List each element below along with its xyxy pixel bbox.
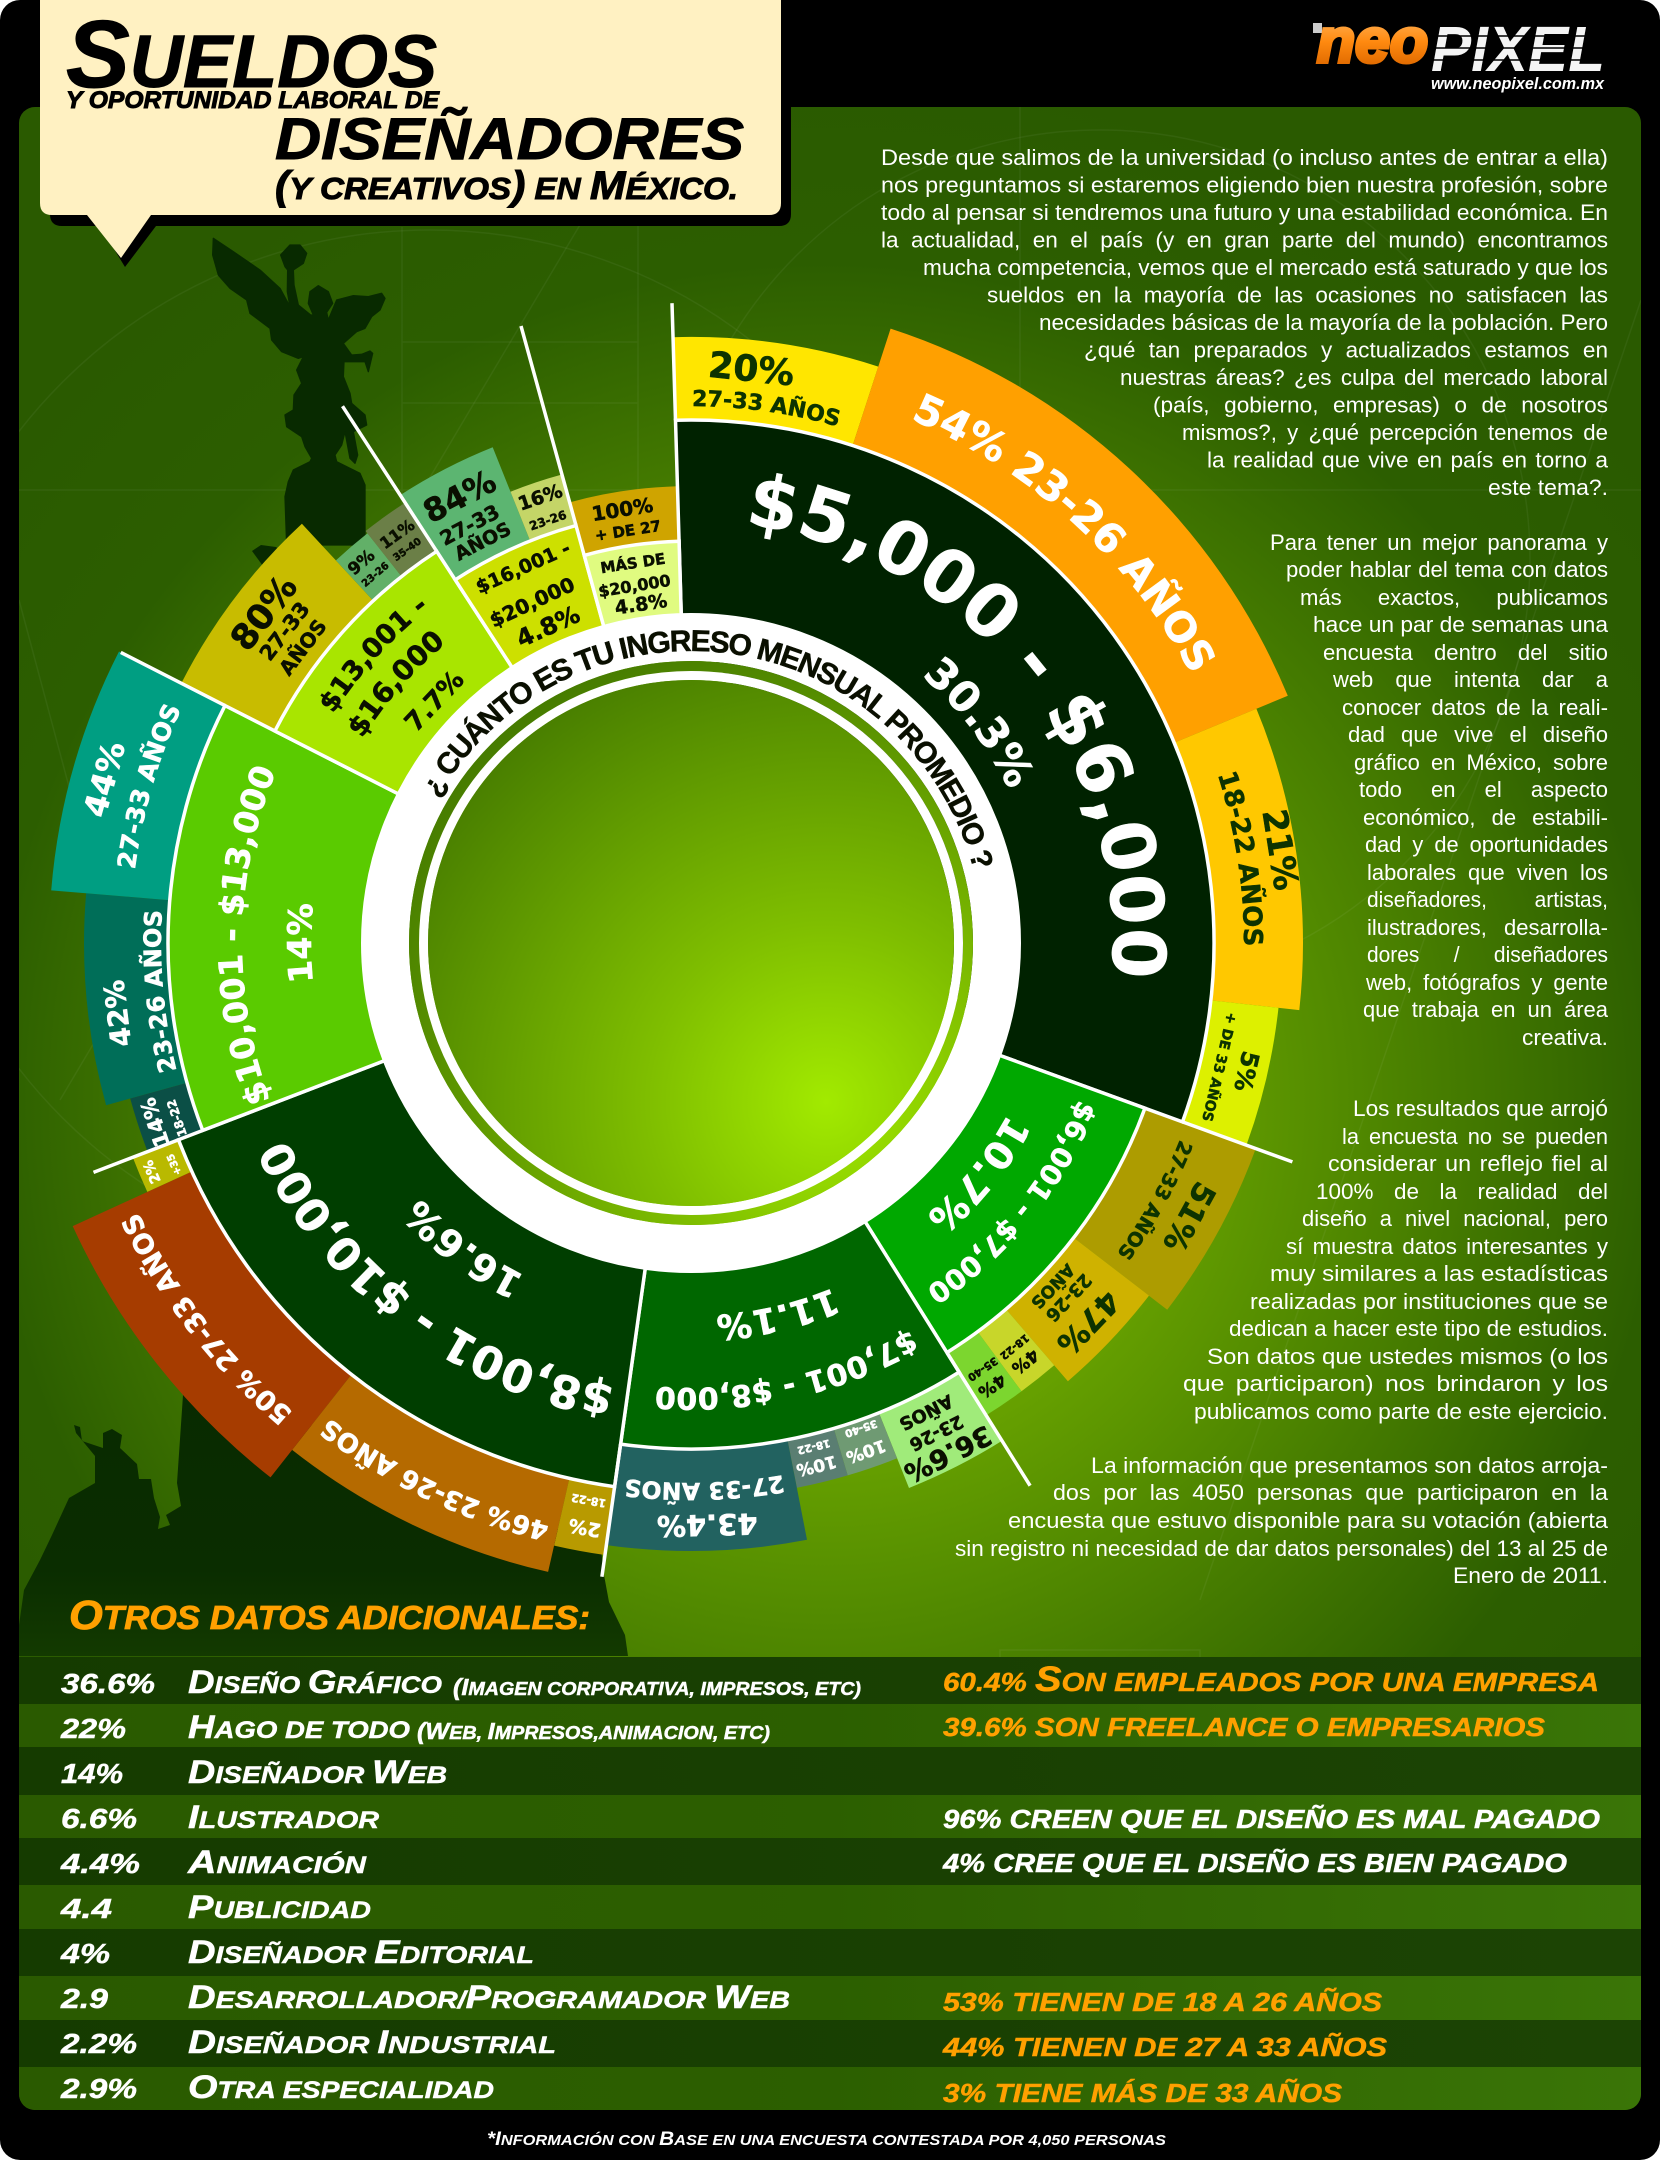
table: specialties column: ANIMACIÓN (187, 1844, 367, 1880)
table: percentages column: 4.4 (60, 1893, 113, 1924)
table: pay perception facts: 4% CREE QUE EL DISEÑO ES BIEN PAGADO (942, 1848, 1567, 1878)
segment: 44% 27-33 años: 27-33 AÑOS (117, 704, 180, 868)
intro text paragraph 1: la actualidad, en el país (y en gran parte del mundo) encontramos (881, 228, 1608, 252)
intro text paragraph 3: realizadas por instituciones que se (1250, 1289, 1608, 1314)
segment: 47% 23-26 años (1006, 1238, 1149, 1381)
intro text paragraph 1: nuestras áreas? ¿es culpa del mercado laboral (1120, 365, 1608, 390)
wedge: $16,001 - $20,000 4.8% (455, 526, 604, 670)
segment: 5% + de 33 años: 5% (1228, 1048, 1265, 1094)
intro text paragraph 3: muy similares a las estadísticas (1270, 1261, 1608, 1286)
wedge: $6,001 - $7,000 10.7% (867, 1054, 1148, 1353)
segment: 46% 23-26 años (292, 1376, 569, 1572)
segment: 44% 27-33 años: 44% (76, 737, 133, 821)
intro text paragraph 4: sin registro ni necesidad de dar datos personales) del 13 al 25 de (955, 1536, 1608, 1561)
table: percentages column: 6.6% (61, 1803, 137, 1834)
table: specialties column (187, 1664, 861, 2105)
intro text paragraph 3: dedican a hacer este tipo de estudios. (1229, 1316, 1608, 1341)
segment: 36.6% 23-26 años: AÑOS (896, 1390, 957, 1436)
segment: 51% 27-33 años: 27-33 AÑOS (1118, 1140, 1192, 1260)
title text: Y OPORTUNIDAD LABORAL DE (66, 87, 440, 114)
intro text paragraph 4 (955, 1453, 1609, 1588)
segment: 54% 23-26 años: 54% 23-26 AÑOS (914, 393, 1216, 670)
segment: 80% 27-33 años: 80% (223, 568, 306, 659)
intro text paragraph 2: dad que vive el diseño (1348, 722, 1608, 747)
table: age facts: 53% TIENEN DE 18 A 26 AÑOS (943, 1987, 1383, 2017)
segment: 2% 18-22: 18-22 (570, 1491, 607, 1510)
segment: 2% 18-22 (554, 1478, 615, 1555)
data table stripes (19, 1657, 1641, 2110)
segment: 4% 18-22: 4% (1007, 1344, 1042, 1378)
intro text paragraph 4: Enero de 2011. (1453, 1563, 1608, 1588)
intro text paragraph 1: mucha competencia, vemos que el mercado está saturado y que los (923, 255, 1608, 280)
wedge: $10,001 - $13,000 14%: 14% (286, 904, 313, 981)
table: specialties column: HAGO DE TODO (188, 1709, 410, 1745)
wedge: $7,001 - $8,000 11.1% (622, 1222, 962, 1451)
footnote: *INFORMACIÓN CON BASE EN UNA ENCUESTA CONTESTADA POR 4,050 PERSONAS (487, 2129, 1166, 2150)
intro text paragraph 2: encuesta dentro del sitio (1323, 640, 1608, 665)
segment: 4% 35-40 (947, 1332, 1022, 1415)
title text: DISEÑADORES (275, 107, 744, 172)
intro text paragraph 2: más exactos, publicamos (1300, 585, 1608, 610)
segment: 21% 18-22 años: 18-22 AÑOS (1218, 772, 1267, 945)
segment: 51% 27-33 años (1075, 1110, 1256, 1310)
table: specialties column: DISEÑO GRÁFICO (188, 1664, 442, 1700)
neopixel logo: www.neopixel.com.mx (1431, 74, 1605, 93)
segment: 100% + de 27: + DE 27 (594, 517, 662, 545)
segment: 14% 18-22 (130, 1083, 203, 1152)
intro text paragraph 2: web, fotógrafos y gente (1365, 970, 1608, 995)
intro text paragraph 3: publicamos como parte de este ejercicio. (1194, 1399, 1608, 1424)
title speech bubble (40, 0, 791, 267)
intro text paragraph 1: necesidades básicas de la mayoría de la población. Pero (1039, 310, 1608, 335)
segment: 10% 35-40 (834, 1413, 897, 1475)
segment: 84% 27-33 años: AÑOS (450, 516, 515, 565)
segment: 47% 23-26 años: AÑOS (1026, 1259, 1080, 1314)
intro text paragraph 1: mismos?, y ¿qué percepción tenemos de (1182, 420, 1608, 445)
segment: 11% 35-40: 11% (376, 515, 418, 553)
intro text paragraph 2: ilustradores, desarrolla- (1367, 915, 1608, 940)
intro text paragraph 1: sueldos en la mayoría de las ocasiones no satisfacen las (987, 282, 1608, 308)
segment: 21% 18-22 años (1176, 708, 1306, 1010)
intro text paragraph 2: poder hablar del tema con datos (1286, 557, 1608, 582)
segment: 84% 27-33 años: 84% (417, 462, 502, 531)
segment: 10% 18-22: 10% (794, 1451, 838, 1480)
segment: 43.4% 27-33 años (608, 1441, 807, 1551)
intro text paragraph 2: Para tener un mejor panorama y (1270, 530, 1608, 555)
wedge: $8,001 - $10,000 16.6% (176, 1062, 647, 1489)
segment: 20% 27-33 años: 27-33 AÑOS (694, 390, 840, 426)
wedge: $8,001 - $10,000 16.6%: 16.6% (406, 1201, 522, 1298)
segment: 20% 27-33 años: 20% (706, 345, 796, 395)
segment: 43.4% 27-33 años: 43.4% (656, 1506, 758, 1543)
segment: 9% 23-26: 9% (344, 546, 379, 580)
table: employment facts (943, 1660, 1599, 1742)
table: specialties column: (WEB, IMPRESOS,ANIMACION, ETC) (417, 1718, 770, 1744)
segment: 2% +35: 2% (140, 1158, 165, 1186)
table: percentages column: 2.9 (60, 1983, 108, 2014)
intro text paragraph 2: dores / diseñadores (1367, 942, 1608, 967)
segment: 50% 27-33 años: 50% 27-33 AÑOS (122, 1214, 292, 1426)
table: age facts (942, 1987, 1388, 2108)
intro text paragraph 2: web que intenta dar a (1332, 667, 1609, 692)
intro text paragraph 4: La información que presentamos son datos arroja- (1091, 1453, 1608, 1478)
intro text paragraph 4: encuesta que estuvo disponible para su votación (abierta (1008, 1508, 1609, 1533)
wedge: $13,001 - $16,000 7.7% (275, 551, 514, 795)
segment: 84% 27-33 años (400, 447, 530, 580)
segment: 16% 23-26: 16% (515, 480, 565, 516)
intro text paragraph 3: diseño a nivel nacional, pero (1302, 1206, 1608, 1231)
table: specialties column: DISEÑADOR WEB (188, 1754, 447, 1790)
wedge: más de $20,000 4.8%: 4.8% (613, 590, 669, 619)
segment: 80% 27-33 años: AÑOS (274, 615, 332, 680)
segment: 80% 27-33 años (181, 524, 373, 731)
wedge: $16,001 - $20,000 4.8%: 4.8% (512, 600, 584, 653)
table: percentages column: 14% (61, 1758, 123, 1789)
neopixel logo: neo (1317, 7, 1428, 76)
intro text paragraph 2: gráfico en México, sobre (1354, 750, 1608, 775)
table: pay perception facts (942, 1804, 1600, 1878)
intro text paragraph 3: considerar un reflejo fiel al (1328, 1151, 1608, 1176)
table: percentages column (60, 1668, 155, 2104)
intro text paragraph 2: todo en el aspecto (1359, 777, 1608, 802)
segment: 2% 18-22: 2% (567, 1514, 603, 1541)
segment: 10% 35-40: 10% (843, 1435, 888, 1467)
segment: 2% +35: +35 (165, 1152, 184, 1177)
segment: 4% 18-22 (978, 1309, 1054, 1391)
segment: 14% 18-22: 14% (136, 1095, 175, 1150)
intro text paragraph 3: sí muestra datos interesantes y (1286, 1234, 1608, 1259)
segment: 36.6% 23-26 años (879, 1372, 1002, 1488)
intro text paragraph 1: este tema?. (1488, 475, 1608, 500)
segment: 4% 18-22: 18-22 (997, 1331, 1031, 1362)
segment: 42% 23-26 años: 23-26 AÑOS (138, 912, 176, 1073)
wedge: más de $20,000 4.8% (584, 541, 681, 629)
wedge: $8,001 - $10,000 16.6%: $8,001 - $10,000 (261, 1144, 612, 1418)
segment: 47% 23-26 años: 23-26 (1041, 1269, 1096, 1325)
wedge: $6,001 - $7,000 10.7%: 10.7% (929, 1117, 1029, 1232)
segment: 43.4% 27-33 años: 27-33 AÑOS (626, 1475, 784, 1505)
table: percentages column: 2.9% (60, 2073, 137, 2104)
segment: 14% 18-22: 18-22 (164, 1098, 190, 1138)
table: employment facts: 39.6% SON FREELANCE O EMPRESARIOS (943, 1712, 1546, 1742)
segment: 10% 35-40: 35-40 (843, 1417, 879, 1439)
table: specialties column: DISEÑADOR EDITORIAL (188, 1934, 534, 1970)
segment: 50% 27-33 años (72, 1172, 350, 1478)
wedge: más de $20,000 4.8%: MÁS DE (599, 549, 667, 577)
table: percentages column: 36.6% (61, 1668, 155, 1699)
wedge: $5,000 - $6,000 30.3%: 30.3% (924, 656, 1034, 787)
segment: 16% 23-26: 23-26 (528, 508, 568, 533)
intro text paragraph 2: conocer datos de la reali- (1342, 695, 1608, 720)
segment: 16% 23-26 (510, 474, 576, 541)
intro text paragraph 3: la encuesta no se pueden (1342, 1124, 1608, 1149)
wedge: $13,001 - $16,000 7.7%: $16,000 (348, 632, 442, 736)
segment: 80% 27-33 años: 27-33 (255, 597, 315, 665)
segment: 46% 23-26 años: 46% 23-26 AÑOS (320, 1420, 548, 1540)
segment: 2% +35 (133, 1140, 192, 1192)
wedge: $13,001 - $16,000 7.7%: 7.7% (399, 665, 470, 738)
wedge: $16,001 - $20,000 4.8%: $16,001 - (473, 537, 574, 598)
wedge: $6,001 - $7,000 10.7%: $6,001 - $7,000 (930, 1102, 1095, 1302)
neopixel logo (1313, 7, 1610, 93)
wedge: $7,001 - $8,000 11.1%: 11.1% (717, 1289, 838, 1341)
intro text paragraph 2: hace un par de semanas una (1313, 612, 1609, 637)
segment: 36.6% 23-26 años: 23-26 (906, 1410, 967, 1455)
segment: 10% 18-22 (788, 1428, 848, 1488)
intro text paragraph 4: dos por las 4050 personas que participaron en la (1053, 1480, 1609, 1505)
intro text paragraph 1: ¿qué tan preparados y actualizados estamos en (1084, 338, 1608, 362)
wedge: $7,001 - $8,000 11.1%: $7,001 - $8,000 (656, 1330, 916, 1410)
segment: 84% 27-33 años: 27-33 (436, 499, 504, 551)
segment: 42% 23-26 años (84, 893, 186, 1106)
table: specialties column: PUBLICIDAD (188, 1889, 371, 1925)
wedge: $10,001 - $13,000 14% (168, 706, 400, 1130)
table: percentages column: 2.2% (60, 2028, 137, 2059)
wedge: más de $20,000 4.8%: $20,000 (597, 571, 672, 601)
table: specialties column: DESARROLLADOR/ PROGRAMADOR WEB (188, 1979, 790, 2015)
table: age facts: 3% TIENE MÁS DE 33 AÑOS (943, 2078, 1343, 2108)
intro text paragraph 1: Desde que salimos de la universidad (o incluso antes de entrar a ella) (881, 145, 1608, 170)
white ring (385, 637, 997, 1249)
intro text paragraph 3: Los resultados que arrojó (1353, 1096, 1608, 1121)
ring question: cuánto es tu ingreso: ¿ CUÁNTO ES TU INGRESO MENSUAL PROMEDIO ? (428, 630, 992, 866)
segment: 44% 27-33 años (51, 652, 223, 900)
segment: 9% 23-26 (336, 533, 402, 601)
table: specialties column: DISEÑADOR INDUSTRIAL (188, 2024, 556, 2060)
intro text paragraph 2: creativa. (1522, 1025, 1608, 1050)
segment: 100% + de 27 (570, 486, 679, 555)
intro text paragraph 2 (1270, 530, 1609, 1050)
intro text paragraph 2: económico, de estabili- (1363, 805, 1608, 830)
intro text paragraph 2: laborales que viven los (1367, 860, 1608, 885)
intro text paragraph 2: diseñadores, artistas, (1367, 887, 1608, 912)
intro text paragraph 3: 100% de la realidad del (1316, 1179, 1608, 1204)
table: percentages column: 22% (60, 1713, 126, 1744)
wedge: $13,001 - $16,000 7.7%: $13,001 - (320, 601, 425, 712)
segment: 10% 18-22: 18-22 (796, 1436, 831, 1456)
heading: otros datos adicionales: OTROS DATOS ADICIONALES: (69, 1592, 590, 1638)
segment: 5% + de 33 años: + DE 33 AÑOS (1198, 1011, 1240, 1123)
wedge: $5,000 - $6,000 30.3%: $5,000 - $6,000 (750, 473, 1168, 976)
wedge: $16,001 - $20,000 4.8%: $20,000 (486, 572, 578, 632)
segment: 54% 23-26 años (853, 328, 1288, 742)
table: age facts: 44% TIENEN DE 27 A 33 AÑOS (942, 2032, 1388, 2062)
segment: 100% + de 27: 100% (590, 493, 655, 526)
segment: 11% 35-40 (366, 503, 437, 576)
segment: 9% 23-26: 23-26 (360, 561, 391, 590)
intro text paragraph 2: que trabaja en un área (1363, 997, 1609, 1022)
segment: 11% 35-40: 35-40 (391, 536, 424, 564)
silhouette: monument base with figure (19, 1370, 628, 1656)
intro text paragraph 3 (1183, 1096, 1608, 1424)
intro text paragraph 1: todo al pensar si tendremos una futuro y una estabilidad económica. En (881, 200, 1608, 225)
wedge: $10,001 - $13,000 14%: $10,001 - $13,000 (218, 766, 274, 1104)
title text: (Y CREATIVOS ) EN MÉXICO. (275, 164, 738, 208)
segment: 5% + de 33 años (1182, 1000, 1278, 1145)
segment: 20% 27-33 años (674, 336, 878, 444)
segment: 36.6% 23-26 años: 36.6% (899, 1419, 997, 1488)
segment: 4% 35-40: 4% (974, 1369, 1009, 1402)
title text (66, 1, 744, 208)
table: pay perception facts: 96% CREEN QUE EL DISEÑO ES MAL PAGADO (943, 1804, 1600, 1834)
table: percentages column: 4.4% (60, 1848, 140, 1879)
intro text paragraph 3: Son datos que ustedes mismos (o los (1207, 1344, 1608, 1369)
table: specialties column: (IMAGEN CORPORATIVA, IMPRESOS, ETC) (453, 1674, 861, 1700)
table: specialties column: ILUSTRADOR (188, 1799, 380, 1835)
intro text paragraph 1: (país, gobierno, empresas) o de nosotros (1153, 392, 1608, 418)
central disk with thin rings (414, 666, 968, 1220)
segment: 21% 18-22 años: 21% (1254, 806, 1306, 893)
neopixel logo: PIXEL (1431, 13, 1605, 85)
table: percentages column: 4% (60, 1938, 110, 1969)
segment: 47% 23-26 años: 47% (1049, 1283, 1127, 1362)
table: employment facts: 60.4% SON EMPLEADOS POR UNA EMPRESA (943, 1660, 1599, 1699)
intro text paragraph 1: la realidad que vive en país en torno a (1207, 448, 1609, 472)
radial chart: outer age segments and inner salary wedges (51, 303, 1306, 1577)
wedge: $5,000 - $6,000 30.3% (674, 418, 1216, 1124)
intro text paragraph 1 (881, 145, 1609, 500)
segment: 51% 27-33 años: 51% (1155, 1175, 1222, 1258)
intro text paragraph 3: que participaron) nos brindaron y los (1183, 1371, 1608, 1396)
title text: SUELDOS (66, 1, 437, 108)
silhouette: angel of independence statue (213, 238, 385, 566)
segment: 42% 23-26 años: 42% (97, 978, 138, 1049)
segment: 4% 35-40: 35-40 (965, 1354, 1000, 1383)
intro text paragraph 2: dad y de oportunidades (1365, 832, 1608, 857)
intro text paragraph 1: nos preguntamos si estaremos eligiendo bien nuestra profesión, sobre (881, 172, 1608, 198)
table: specialties column: OTRA ESPECIALIDAD (188, 2069, 494, 2105)
